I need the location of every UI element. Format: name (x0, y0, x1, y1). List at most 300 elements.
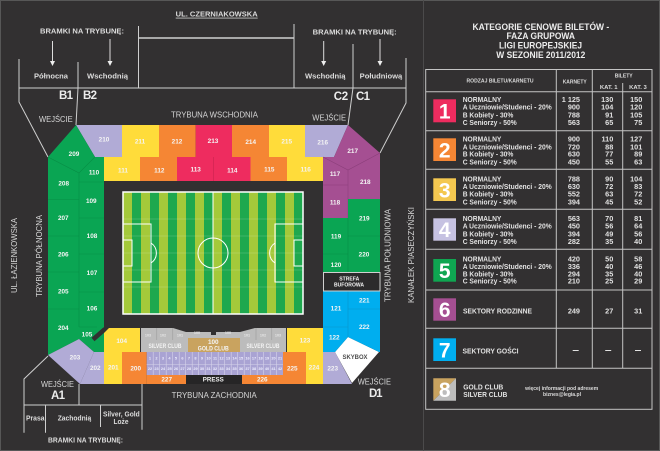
sector 214: 214 (245, 139, 256, 146)
price row 3: NORMALNY (463, 175, 502, 184)
price row 4: NORMALNY (463, 214, 502, 223)
silver club: 102 (160, 334, 166, 338)
price row 6: 6 (439, 299, 451, 322)
price row 3: 788 (568, 175, 580, 184)
table header: KAT. 3 (629, 85, 647, 91)
VIP seat blocks 1-42: 2 (155, 355, 158, 360)
price row 5: 210 (568, 277, 580, 286)
VIP seat blocks 1-42: 35 (232, 366, 237, 371)
sector 204: 204 (58, 325, 69, 332)
sector 121: 121 (331, 306, 342, 313)
price row 5: 35 (605, 269, 613, 278)
sector 227 (147, 375, 186, 384)
sector 223: 223 (327, 365, 338, 372)
sector 106: 106 (87, 306, 98, 313)
sector 114 (214, 157, 250, 181)
VIP seat blocks 1-42: 8 (194, 355, 197, 360)
VIP seat blocks 1-42: 41 (271, 366, 276, 371)
buffer zone (324, 272, 380, 291)
sector 113 (177, 157, 214, 181)
price row 5: C Seniorzy - 50% (463, 277, 517, 286)
sector 209 (48, 125, 95, 173)
price row 2: 720 (568, 142, 580, 151)
price row 4: 40 (634, 237, 642, 246)
gate label: Południową: Południową (360, 72, 403, 81)
sector 227: 227 (161, 376, 172, 384)
VIP seat blocks 1-42: 31 (206, 366, 211, 371)
gate label: Północna: Północna (34, 72, 69, 81)
stand name: Trybuna Południowa: TRYBUNA POŁUDNIOWA (384, 208, 393, 302)
price row 4: 64 (634, 222, 643, 231)
price row 5 (433, 254, 642, 286)
entrance label: D1: D1 (369, 388, 383, 400)
price row 2: 2 (439, 139, 451, 162)
price row 8: GOLD CLUB (463, 383, 503, 392)
price row 5: NORMALNY (463, 254, 502, 263)
price row 3: 83 (634, 182, 642, 191)
price row 4 (433, 214, 643, 246)
price row 5: B Kobiety - 30% (463, 269, 514, 278)
price row 3: 90 (605, 175, 613, 184)
VIP seat blocks 1-42: 23 (154, 366, 159, 371)
sector 214 (232, 125, 269, 157)
press box: PRESS (203, 377, 225, 384)
price row 6: SEKTORY RODZINNE (463, 306, 532, 315)
silver club: 103 (145, 334, 151, 338)
sector 107: 107 (87, 270, 98, 277)
price row 6: 31 (634, 306, 642, 315)
sector 212: 212 (172, 138, 183, 145)
sector 204 (48, 309, 79, 355)
table header: BILETY (615, 74, 633, 80)
gate label: Zachodnią: Zachodnią (58, 414, 92, 422)
price row 1: 65 (605, 118, 613, 127)
sector 111: 111 (118, 167, 128, 174)
VIP seat blocks 1-42: 32 (213, 366, 218, 371)
price row 2 (433, 135, 642, 166)
stand name: Trybuna Północna: TRYBUNA PÓŁNOCNA (35, 214, 44, 297)
VIP seat blocks 1-42: 17 (252, 355, 256, 360)
price row 5: 46 (634, 262, 642, 271)
gate label: Silver, Gold Loże: Loże (114, 417, 128, 426)
price row 1: A Uczniowie/Studenci - 20% (463, 103, 552, 112)
sector 123 (287, 328, 323, 352)
price row 4: 81 (634, 214, 642, 223)
sector 121 (323, 292, 348, 327)
table header: RODZAJ BILETU/KARNETU (466, 78, 534, 84)
price row 8: więcej informacji pod adresem (524, 386, 599, 392)
VIP seat blocks 1-42: 42 (278, 366, 283, 371)
VIP seat blocks 1-42: 16 (245, 355, 250, 360)
arrow: Wschodnią right (321, 41, 326, 66)
price row 2: 88 (605, 142, 613, 151)
price row 2: B Kobiety - 30% (463, 150, 514, 159)
VIP seat blocks 1-42: 1 (149, 355, 152, 360)
VIP seat blocks 1-42: 22 (148, 366, 153, 371)
sector 116: 116 (301, 167, 311, 174)
price row 5: A Uczniowie/Studenci - 20% (463, 262, 552, 271)
VIP seat blocks 1-42: 7 (188, 355, 190, 360)
sector 215 (269, 125, 305, 157)
sector 209: 209 (69, 151, 80, 158)
sector 110 (79, 157, 104, 182)
VIP seat blocks 1-42: 15 (239, 355, 244, 360)
price row 5: 336 (568, 262, 580, 271)
entrance code: C1: C1 (356, 91, 371, 103)
gate heading: left: BRAMKI NA TRYBUNĘ: (40, 27, 124, 36)
arrow: Północna (50, 41, 55, 66)
silver club: 100 (194, 331, 200, 335)
price row 6: 249 (568, 306, 580, 315)
silver club: 102 (260, 334, 266, 338)
price row 4: 56 (634, 229, 642, 238)
sector 105 (79, 327, 105, 352)
sector 108: 108 (87, 233, 98, 240)
price row 5: 50 (605, 254, 613, 263)
stand name: Trybuna Wschodnia: TRYBUNA WSCHODNIA (171, 110, 259, 120)
sector 110: 110 (89, 170, 100, 177)
price row 2: C Seniorzy - 50% (463, 157, 517, 166)
sector 226: 226 (257, 376, 268, 384)
pitch (123, 192, 303, 314)
sector 104: 104 (116, 338, 127, 345)
VIP seat blocks 1-42: 37 (245, 366, 250, 371)
VIP seat blocks 1-42: 33 (219, 366, 224, 371)
VIP seat blocks 1-42: 4 (168, 355, 171, 360)
sector 215: 215 (281, 138, 292, 145)
VIP seat blocks 1-42: 25 (167, 366, 172, 371)
price row 2: 55 (605, 157, 613, 166)
entrance label: A1: WEJŚCIE (41, 380, 74, 389)
price row 3: 52 (634, 197, 642, 206)
price row 3: 3 (439, 179, 451, 202)
gate heading: bottom: BRAMKI NA TRYBUNĘ: (48, 436, 123, 445)
sector 223 (323, 352, 352, 384)
sector 122 (323, 327, 348, 352)
sector 123: 123 (300, 337, 311, 344)
sector 108 (79, 218, 104, 254)
sector 118 (323, 185, 348, 218)
sector 220: 220 (359, 252, 370, 259)
price row 4: 563 (568, 214, 580, 223)
sector 213 (196, 125, 232, 157)
entrance label: A1 (41, 380, 74, 402)
sector 224: 224 (309, 365, 320, 372)
price row 8: biznes@legia.pl (543, 392, 582, 398)
price row 2: 89 (634, 150, 642, 159)
price row 1 (433, 95, 642, 127)
entrance label: left top: WEJŚCIE (39, 115, 73, 124)
VIP seat blocks 1-42: 6 (181, 355, 184, 360)
sector 208 (48, 157, 79, 200)
sector 221: 221 (359, 297, 370, 304)
price row 8: 8 (439, 379, 451, 402)
price row 5: 40 (634, 269, 642, 278)
sector 112: 112 (154, 167, 165, 174)
gate guide lines: top (19, 24, 406, 157)
VIP seat blocks 1-42: 40 (265, 366, 269, 371)
price row 1: 788 (568, 110, 580, 119)
sector 207: 207 (58, 215, 69, 222)
sector 117: 117 (330, 171, 341, 178)
price row 4: 450 (568, 222, 580, 231)
price row 2: 630 (568, 150, 580, 159)
VIP seat blocks 1-42: 11 (213, 355, 218, 360)
price row 1: 104 (601, 103, 614, 112)
sector 111 (104, 157, 140, 181)
table header (466, 74, 647, 91)
sector 222: 222 (359, 324, 370, 331)
skybox (335, 337, 379, 383)
sector 222 (348, 309, 380, 352)
street label: Kanałek Piaseczyński: KANAŁEK PIASECZYŃSKI (407, 207, 416, 303)
sector 113: 113 (191, 166, 201, 173)
price row 1: NORMALNY (463, 95, 502, 104)
price row 2: 110 (602, 135, 613, 144)
sector 115: 115 (264, 166, 275, 173)
VIP seat blocks 1-42: 12 (219, 355, 224, 360)
sector 205 (48, 272, 79, 309)
price row 5: 29 (634, 277, 642, 286)
sector 207 (48, 200, 79, 236)
price row 4: 49 (605, 229, 613, 238)
price row 1: 150 (630, 95, 642, 104)
gate guide lines: bottom (24, 356, 142, 433)
stand name: Trybuna Zachodnia: TRYBUNA ZACHODNIA (172, 391, 257, 400)
sector 114: 114 (227, 167, 238, 174)
sector 211 (122, 125, 159, 157)
sector 112 (140, 157, 177, 181)
VIP seat blocks 1-42: 21 (278, 355, 283, 360)
VIP seat blocks 1-42: 5 (175, 355, 178, 360)
silver club: 103 (275, 334, 281, 338)
sector 107 (79, 254, 104, 292)
price row 5: 40 (605, 262, 613, 271)
sector 206: 206 (58, 252, 69, 259)
VIP seat blocks 1-42: 14 (232, 355, 237, 360)
VIP seat blocks 1-42: 27 (180, 366, 185, 371)
gate label: Wschodnią right: Wschodnią (305, 72, 346, 81)
silver club: SILVER CLUB (148, 343, 182, 350)
price row 1: 1 125 (562, 95, 580, 104)
price row 3: 630 (568, 182, 580, 191)
sector 224 (306, 352, 323, 384)
price row 5: 294 (568, 269, 581, 278)
gate label: Wschodnią left: Wschodnią (87, 72, 129, 81)
price row 5: 58 (634, 254, 642, 263)
sector 109: 109 (86, 198, 97, 205)
price row 2: 900 (568, 135, 580, 144)
VIP seat blocks 1-42: 3 (162, 355, 165, 360)
VIP seat blocks 1-42: 9 (201, 355, 204, 360)
sector 119: 119 (331, 234, 342, 241)
price row 3: B Kobiety - 30% (463, 190, 514, 199)
gate label: Prasa: Prasa (26, 414, 45, 422)
silver club (141, 328, 286, 352)
sector 217: 217 (347, 148, 358, 155)
VIP seat blocks 1-42: 20 (271, 355, 276, 360)
sector 220 (348, 236, 380, 272)
price row 4: A Uczniowie/Studenci - 20% (463, 222, 552, 231)
silver club: 101 (177, 334, 183, 338)
sector 105: 105 (82, 331, 93, 338)
VIP seat blocks 1-42 (147, 352, 283, 375)
sector 225 (283, 352, 306, 384)
entrance code: C2: C2 (334, 91, 348, 103)
VIP seat blocks 1-42: 10 (206, 355, 211, 360)
price row 1: B Kobiety - 30% (463, 110, 514, 119)
price row 5: 25 (605, 277, 613, 286)
sector 203 (48, 339, 94, 384)
sector 210: 210 (99, 136, 110, 143)
gold club: 100 (208, 339, 219, 346)
price row 1: 120 (630, 103, 642, 112)
buffer zone: BUFOROWA (334, 282, 364, 288)
sector 205: 205 (58, 288, 69, 295)
sector 211: 211 (135, 138, 146, 145)
VIP seat blocks 1-42: 19 (265, 355, 270, 360)
price row 7: 7 (439, 339, 451, 362)
silver club: 101 (244, 334, 250, 338)
price row 2: 127 (630, 135, 642, 144)
gate label: Silver, Gold Loże (103, 409, 140, 426)
price row 3: 552 (568, 190, 580, 199)
sector 119 (323, 218, 348, 254)
sector 208: 208 (58, 181, 69, 188)
price row 3 (433, 175, 643, 206)
sector 120: 120 (331, 262, 342, 269)
price row 4: C Seniorzy - 50% (463, 237, 517, 246)
price row 1: 105 (630, 110, 642, 119)
gate heading: right: BRAMKI NA TRYBUNĘ: (313, 28, 397, 37)
price row 1: 900 (568, 103, 580, 112)
price panel title: LIGI EUROPEJSKIEJ (499, 40, 582, 50)
price row 2: 450 (568, 157, 580, 166)
sector 226 (242, 375, 283, 384)
table header: KARNETY (563, 80, 587, 86)
sector 200 (122, 352, 147, 384)
price row 1: C Seniorzy - 50% (463, 118, 517, 127)
entrance label: A1: A1 (51, 390, 66, 402)
price row 2: 77 (605, 150, 613, 159)
VIP seat blocks 1-42: 28 (187, 366, 192, 371)
VIP seat blocks 1-42: 29 (193, 366, 198, 371)
gate label: Silver, Gold Loże: Silver, Gold (103, 409, 140, 418)
price row 6 (433, 298, 642, 322)
arrow: Wschodnią left (108, 39, 112, 66)
sector 201 (104, 352, 122, 384)
VIP seat blocks 1-42: 34 (226, 366, 231, 371)
sector 116 (287, 157, 323, 181)
VIP seat blocks 1-42: 18 (258, 355, 263, 360)
sector 212 (159, 125, 196, 157)
price row 7: SEKTORY GOŚCI (462, 346, 518, 355)
price row 3: 63 (605, 190, 613, 199)
price row 4: B Kobiety - 30% (463, 229, 514, 238)
entrance code: B2: B2 (83, 90, 97, 102)
sector 216: 216 (317, 140, 328, 147)
price row 3: 394 (568, 197, 581, 206)
sector 120 (323, 254, 348, 272)
sector 216 (305, 125, 348, 157)
price row 1: 563 (568, 118, 580, 127)
price row 4: 282 (568, 237, 580, 246)
sector 218 (348, 153, 380, 199)
price row 3: 104 (630, 175, 643, 184)
VIP seat blocks 1-42: 24 (161, 366, 166, 371)
price row 7 (433, 338, 641, 362)
sector 200: 200 (130, 366, 141, 373)
VIP seat blocks 1-42: 39 (258, 366, 263, 371)
arrow: Południową (378, 39, 382, 66)
price panel title: FAZA GRUPOWA (506, 31, 576, 41)
price row 6: 27 (605, 306, 613, 315)
price row 3: 45 (605, 197, 613, 206)
sector 206 (48, 236, 79, 272)
price row 1: 1 (439, 100, 451, 124)
entrance code: B1: B1 (59, 90, 74, 102)
sector 203: 203 (70, 355, 81, 362)
sector 202 (80, 352, 104, 384)
price row 3: 72 (634, 190, 642, 199)
press box (186, 375, 242, 384)
VIP seat blocks 1-42: 26 (174, 366, 179, 371)
entrance label: D1: WEJŚCIE (358, 378, 391, 386)
price row 5: 420 (568, 254, 580, 263)
street label: ul. Łazienkowska: UL. ŁAZIENKOWSKA (10, 217, 19, 293)
entrance label: right top: WEJŚCIE (312, 114, 346, 123)
price panel title: W SEZONIE 2011/2012 (496, 50, 585, 60)
sector 219 (348, 199, 380, 236)
VIP seat blocks 1-42: 38 (252, 366, 257, 371)
sector 217 (323, 125, 380, 170)
sector 221 (348, 292, 380, 309)
entrance label: D1 (358, 378, 391, 400)
sector 104 (104, 328, 140, 352)
sector 210 (76, 125, 122, 157)
table header: KAT. 1 (600, 85, 618, 91)
price row 8 (433, 378, 599, 402)
price row 4: 56 (605, 222, 613, 231)
VIP seat blocks 1-42: 36 (239, 366, 244, 371)
price row 4: 35 (605, 237, 613, 246)
sector 201: 201 (108, 364, 119, 371)
sector 118: 118 (330, 200, 341, 207)
price row 4: 394 (568, 229, 581, 238)
silver club: 100 (225, 331, 231, 335)
price row 5: 5 (439, 260, 451, 283)
VIP seat blocks 1-42: 30 (200, 366, 204, 371)
price row 2: 63 (634, 157, 642, 166)
buffer zone: STREFA (339, 276, 359, 282)
silver club: SILVER CLUB (246, 343, 280, 350)
sector 213: 213 (208, 138, 219, 145)
sector 225: 225 (287, 366, 298, 373)
sector 109 (79, 182, 104, 218)
sector 106 (79, 292, 104, 327)
street label: ul. Czerniakowska: UL. CZERNIAKOWSKA (176, 10, 258, 19)
gold club: GOLD CLUB (198, 345, 229, 352)
price panel title (472, 21, 609, 60)
sector 115 (250, 157, 287, 181)
price row 2: A Uczniowie/Studenci - 20% (463, 142, 552, 151)
price row 4: 70 (605, 214, 613, 223)
price row 3: C Seniorzy - 50% (463, 197, 517, 206)
price row 1: 75 (634, 118, 642, 127)
price row 1: 130 (601, 95, 613, 104)
price row 3: 72 (605, 182, 613, 191)
price row 2: NORMALNY (463, 135, 502, 144)
